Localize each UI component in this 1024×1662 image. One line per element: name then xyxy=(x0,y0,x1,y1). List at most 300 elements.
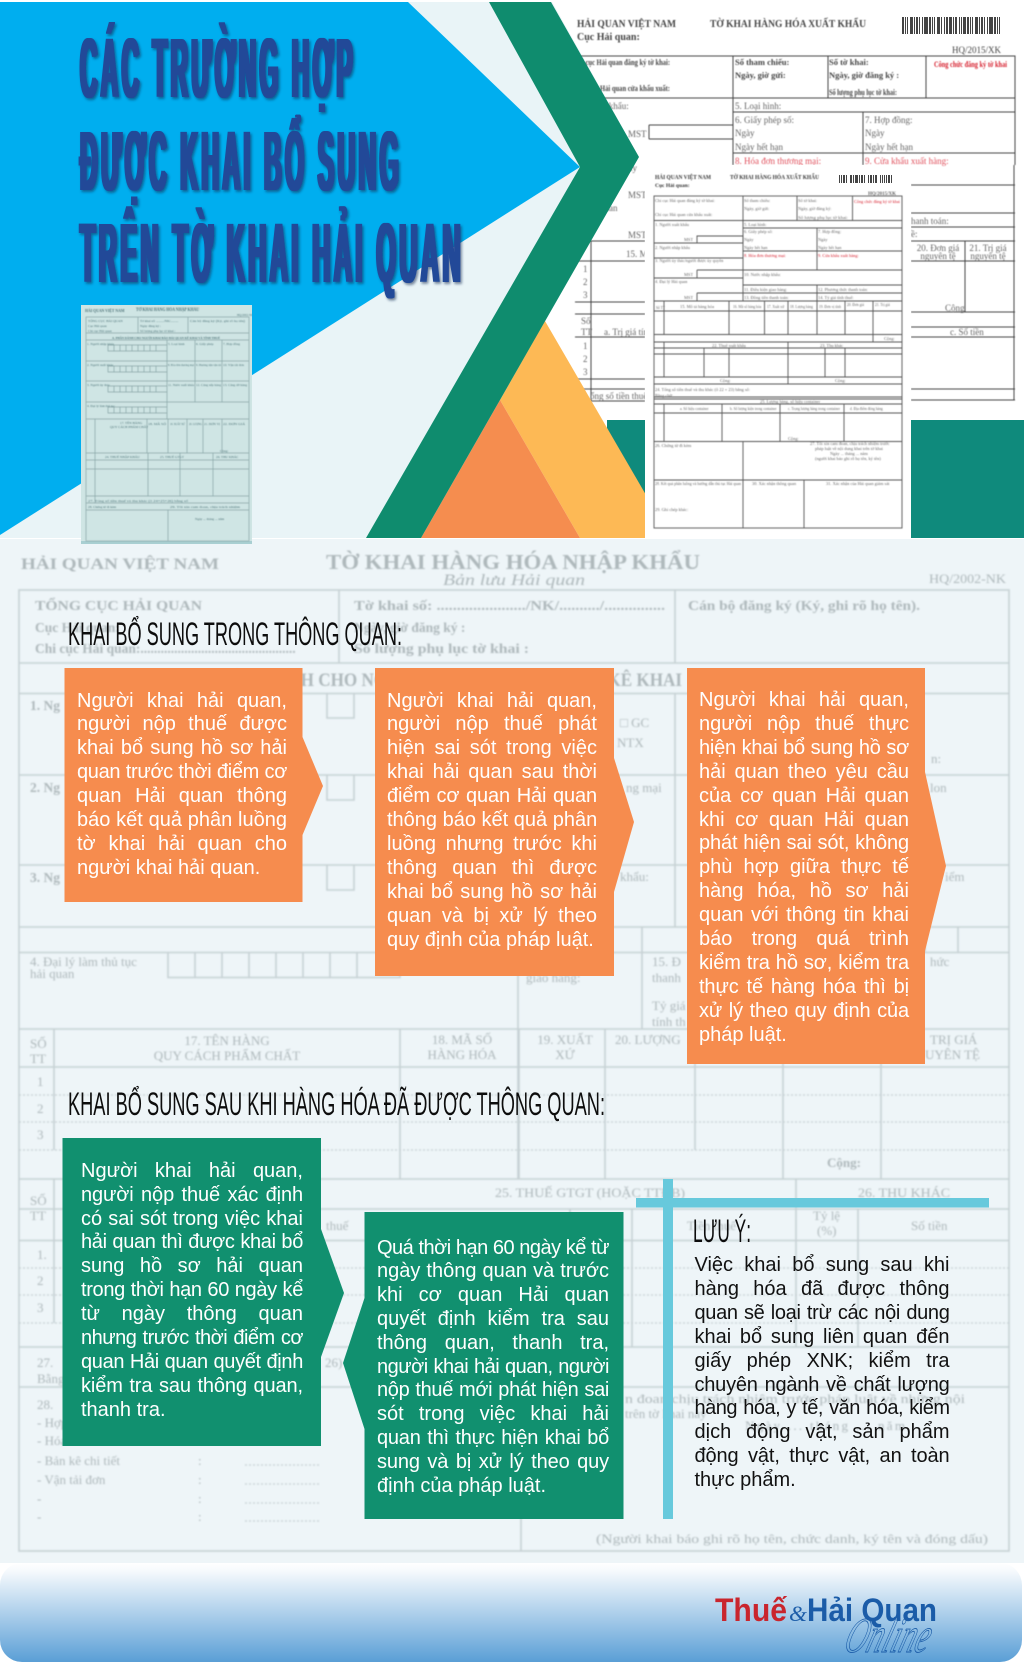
text block: lưu ý note: hàng hóa, y tế, văn hóa, kiểm xyxy=(694,1397,950,1419)
big export declaration form: 5. Loại hình: xyxy=(735,101,781,111)
background form: faded import declaration: ng mại xyxy=(626,780,662,795)
small export form: Ngày hết hạn xyxy=(744,245,768,250)
big export declaration form: nguyên tệ xyxy=(970,251,1006,261)
small export form: 22. Thuế xuất khẩu xyxy=(712,343,747,348)
big export declaration form: Ngày xyxy=(735,128,755,138)
small export form: 31. Xác nhận của Hải quan giám sát xyxy=(826,481,890,486)
panel: orange callout 2: quan và bị xử lý theo xyxy=(387,905,597,927)
teal blocks xyxy=(607,420,647,538)
panel: green callout 2: người khai hải quan, người xyxy=(377,1356,609,1378)
text block: lưu ý note: quan sẽ loại trừ các nội dung xyxy=(694,1302,950,1324)
big export declaration form: Ngày xyxy=(865,128,885,138)
panel: orange callout 2: quy định của pháp luật. xyxy=(387,929,594,951)
panel: green callout 2: quan thì thực hiện khai bổ xyxy=(377,1427,609,1449)
background form: faded import declaration: 3 xyxy=(37,1300,44,1315)
big export declaration form: hanh toán: xyxy=(911,216,949,226)
thumbnail import declaration form: 24. THUẾ NHẬP KHẨU xyxy=(105,454,140,459)
background form: faded import declaration: 19. XUẤT xyxy=(537,1032,593,1047)
orange triangle xyxy=(421,400,580,538)
thumbnail import declaration form: 9. Phương tiện vận tải xyxy=(196,363,221,367)
panel: orange callout 1: quan trước thời điểm cơ xyxy=(77,761,287,783)
small export form: 9. Cửa khẩu xuất hàng: xyxy=(818,253,859,258)
big export declaration form: c. Số tiền xyxy=(950,327,984,337)
background form: faded import declaration: 26) xyxy=(325,1355,342,1370)
small export form: Số TT xyxy=(656,306,666,310)
big export declaration form: Số lượng phụ lục tờ khai: xyxy=(829,87,897,97)
background form: faded import declaration: - xyxy=(37,1509,41,1524)
footer band xyxy=(0,1563,1022,1662)
thumbnail import declaration form: 13. Cảng dỡ hàng xyxy=(223,383,247,387)
panel: green callout 2: ngày thông quan và trước xyxy=(377,1260,609,1282)
background form: faded import declaration: 25. THUẾ GTGT (HOẶC TTĐB) xyxy=(495,1185,685,1200)
panel: green callout 2: sung và bị xử lý theo quy xyxy=(377,1451,609,1473)
small export form: 30. Xác nhận thông quan xyxy=(752,481,797,486)
small export form: Công chức đăng ký tờ khai xyxy=(854,199,901,204)
panel: green callout 1: nhưng trước thời điểm cơ xyxy=(81,1327,303,1349)
small export form: Chi cục Hải quan đăng ký tờ khai: xyxy=(655,198,715,203)
text block: lưu ý note: hàng hóa đã được thông xyxy=(694,1278,950,1300)
small export form: pháp luật về nội dung khai trên tờ khai xyxy=(815,446,884,451)
panel: orange callout 3: thực tế hàng hóa thì bị xyxy=(699,976,909,998)
thumbnail import declaration form: Số lượng phụ lục tờ khai : xyxy=(140,329,175,333)
panel: green callout 2: khi cơ quan Hải quan xyxy=(377,1284,609,1306)
big export declaration form: TỜ KHAI HÀNG HÓA XUẤT KHẨU xyxy=(710,17,866,30)
thumbnail import declaration form: 6. Giấy phép xyxy=(196,342,214,346)
background form: faded import declaration: 18. MÃ SỐ xyxy=(432,1032,492,1047)
thumbnail import declaration form: A. PHẦN DÀNH CHO NGƯỜI KHAI BÁO HẢI QUAN KÊ KHAI VÀ TÍNH THUẾ xyxy=(112,335,221,340)
background form: faded import declaration: - Hợp xyxy=(37,1415,67,1430)
big export declaration form: ổng số tiền thuế và xyxy=(590,391,658,401)
background form: faded import declaration: TỔNG CỤC HẢI QUAN xyxy=(35,598,202,613)
text block: lưu ý note: thực phẩm. xyxy=(694,1469,796,1491)
panel: green callout 1: thanh tra. xyxy=(81,1399,166,1421)
thumbnail import declaration form: 28. Chứng từ đi kèm xyxy=(88,505,116,509)
text block: lưu ý note: chuyên ngành về chất lượng xyxy=(694,1374,950,1396)
thumbnail import declaration form: 3. Người ủy thác xyxy=(87,383,110,387)
thumbnail import declaration form: 7. Hợp đồng xyxy=(223,342,240,346)
thumbnail import declaration form: QUY CÁCH PHẨM CHẤT xyxy=(110,424,149,429)
background form: faded import declaration: Ngày ... tháng ... năm xyxy=(745,1418,905,1433)
panel: orange callout 3: Người khai hải quan, xyxy=(699,689,909,711)
background form: faded import declaration: : xyxy=(198,1453,202,1468)
big export declaration form: 3 xyxy=(583,290,588,300)
background form: faded import declaration: giao hàng: xyxy=(526,970,581,985)
thumbnail import declaration form: 17. TÊN HÀNG xyxy=(120,420,143,425)
big export declaration form: i cục Hải quan đăng ký tờ khai: xyxy=(582,57,670,67)
small export form: TỜ KHAI HÀNG HÓA XUẤT KHẨU xyxy=(730,173,819,181)
background form: faded import declaration: 20. LƯỢNG xyxy=(615,1032,681,1047)
panel: green callout 2 xyxy=(343,1212,624,1519)
thumbnail import declaration form: Cán bộ đăng ký (Ký, ghi rõ họ tên) xyxy=(190,319,245,324)
big export declaration form: 9. Cửa khẩu xuất hàng: xyxy=(865,156,949,166)
big export declaration form: ủy xyxy=(628,163,638,173)
thumbnail import declaration form: 8. Hóa đơn thương mại xyxy=(168,363,194,367)
panel: orange callout 2: điểm cơ quan Hải quan xyxy=(387,785,597,807)
header background xyxy=(0,2,1024,538)
big export declaration form: Công chức đăng ký tờ khai xyxy=(934,60,1008,69)
big export declaration form: 3 xyxy=(583,367,588,377)
small export form: 7. Hợp đồng: xyxy=(818,229,841,234)
big export declaration form: Ngày hết hạn xyxy=(865,142,913,152)
big export declaration form: quan xyxy=(600,203,618,213)
panel: orange callout 3: người nộp thuế thực xyxy=(699,713,909,735)
panel: green callout 2: nộp thuế mới phát hiện sai xyxy=(377,1379,609,1401)
background form: faded import declaration: Cộng: xyxy=(827,1155,861,1170)
background form: faded import declaration: - Vận tải đơn xyxy=(37,1472,106,1487)
small export form: Ngày xyxy=(818,237,828,242)
thumbnail import declaration form: 26. THU KHÁC xyxy=(216,454,239,459)
big export declaration form: Hải quan cửa khẩu xuất: xyxy=(600,83,670,93)
background form: faded import declaration: Tỷ giá xyxy=(652,998,686,1013)
thumbnail import declaration form: 5. Loại hình xyxy=(168,342,185,346)
panel: orange callout 1: khai bổ sung hồ sơ hải xyxy=(77,737,287,759)
panel: orange callout 3: xử lý theo quy định của xyxy=(699,1000,909,1022)
panel: orange callout 2: khai hải quan sau thời xyxy=(387,761,597,783)
text block: lưu ý note xyxy=(694,1254,950,1491)
background form: faded import declaration: 3. Ng xyxy=(30,870,60,885)
small export form: Bằng chữ: xyxy=(655,393,673,398)
background form: faded import declaration: tính th xyxy=(652,1014,686,1029)
background form: faded import declaration: 4. Đại lý làm thủ tục xyxy=(30,954,137,969)
big export declaration form xyxy=(551,17,1015,401)
big export declaration form: Số xyxy=(581,316,591,326)
thumbnail import declaration form: Tờ khai số: ........./NK/......... xyxy=(140,319,178,323)
background form: faded import declaration: Bằng xyxy=(37,1371,65,1386)
small export form: Số tham chiếu: xyxy=(744,198,770,203)
panel: orange callout 1: báo kết quả phân luồng xyxy=(77,809,287,831)
small export form: 11. Điều kiện giao hàng: xyxy=(744,287,787,292)
small export form: 18. Lượng hàng xyxy=(790,305,813,309)
barcode small xyxy=(839,175,895,183)
background form: faded import declaration: n đoan chịu trách nhiệm trước pháp luật về những nội xyxy=(625,1391,965,1406)
small export form: 29. Ghi chép khác: xyxy=(655,507,688,512)
small export form: Ngày, giờ đăng ký: xyxy=(798,206,832,212)
panel: orange callout 3: hàng hóa, hồ sơ hải xyxy=(699,880,909,902)
background form: faded import declaration: A. PHẦN DÀNH CHO NGƯỜI KHAI BÁO HẢI QUAN KÊ KHAI xyxy=(190,669,682,691)
background form: faded import declaration: □ GC xyxy=(620,715,649,730)
big export declaration form: 6. Giấy phép số: xyxy=(735,115,794,125)
small export form: 28. Kết quả phân luồng và hướng dẫn thủ tục Hải quan xyxy=(655,481,742,486)
background form: faded import declaration: Bản lưu Hải quan xyxy=(443,572,585,589)
big export declaration form: 2 xyxy=(583,354,588,364)
big export declaration form: 20. Đơn giá xyxy=(917,243,959,253)
small export form: 14. Tỷ giá tính thuế: xyxy=(818,295,854,300)
small export form: HQ/2015/XK xyxy=(868,192,896,197)
thumbnail import declaration form: TỔNG CỤC HẢI QUAN xyxy=(88,318,123,323)
background form: faded import declaration: XỨ xyxy=(555,1047,576,1062)
small export form: 8. Hóa đơn thương mại: xyxy=(744,253,786,258)
big export declaration form: MST xyxy=(628,190,647,200)
small export form: 12. Phương thức thanh toán: xyxy=(818,287,868,292)
big export declaration form: 1 xyxy=(583,264,588,274)
text block: lưu ý note: động vật, thực vật, an toàn xyxy=(694,1445,950,1467)
text block: lưu ý note: dịch động vật, sản phẩm xyxy=(694,1421,950,1443)
panel: orange callout 3: phát hiện sai sót, không xyxy=(699,832,909,854)
panel: orange callout 2: Người khai hải quan, xyxy=(387,690,597,712)
thumbnail import declaration form: 27. Tổng số tiền thuế và thu khác (ô 24+25+26) bằng số xyxy=(88,498,188,503)
small export form: 23. Thu khác xyxy=(820,343,843,348)
small export form: MST xyxy=(684,272,693,277)
thumbnail import declaration form xyxy=(81,305,252,544)
panel: orange callout 3: phù hợp giữa thực tế xyxy=(699,856,909,878)
panel: orange callout 1: người khai hải quan. xyxy=(77,857,260,879)
small export form: Cộng: xyxy=(884,336,895,341)
panel: orange callout 2: luồng nhưng trước khi xyxy=(387,833,597,855)
background form: faded import declaration: 1. xyxy=(37,1247,47,1262)
icon: light blue cross divider xyxy=(636,1179,989,1519)
thumbnail import declaration form: 4. Đại lý làm thủ tục xyxy=(87,404,115,408)
background form: faded import declaration: NTX xyxy=(617,735,644,750)
small export form: 5. Loại hình: xyxy=(744,222,767,227)
panel: orange callout 2: khai bổ sung hồ sơ hải xyxy=(387,881,597,903)
small export form: c. Trọng lượng hàng trong container xyxy=(788,407,841,411)
logo: Thuế & Hải Quan Online xyxy=(715,1592,940,1662)
thumbnail import declaration form: 18. MÃ SỐ xyxy=(148,421,167,426)
thumbnail import declaration form: TỜ KHAI HÀNG HÓA NHẬP KHẨU xyxy=(136,307,199,313)
background form: faded import declaration: HQ/2002-NK xyxy=(929,572,1006,586)
big export declaration form: nguyên tệ xyxy=(920,251,956,261)
panel: orange callout 3: của cơ quan Hải quan xyxy=(699,785,909,807)
background form: faded import declaration: QUY CÁCH PHẨM CHẤT xyxy=(154,1048,300,1063)
background form: faded import declaration: iểm xyxy=(945,869,964,884)
small export form: MST xyxy=(684,237,693,242)
small export form: Ngày hết hạn xyxy=(818,245,842,250)
big export declaration form: HQ/2015/XK xyxy=(952,45,1001,55)
background form: faded import declaration: - Hóa xyxy=(37,1433,66,1448)
panel: orange callout 3: báo trong quá trình xyxy=(699,928,909,950)
panel: green callout 2: quyết định kiểm tra sau xyxy=(377,1308,609,1330)
big export declaration form: TT xyxy=(581,327,592,337)
small export form: 24. Tổng số tiền thuế và thu khác (ô 22 + 23) bằng số: xyxy=(655,387,750,392)
small export form: 10. Nước nhập khẩu: xyxy=(744,272,781,277)
background form: faded import declaration: trên tờ khai này xyxy=(625,1406,707,1421)
thumbnail import declaration form: 19. XUẤT XỨ xyxy=(170,421,185,426)
background form: faded import declaration: 1. Ng xyxy=(30,698,60,713)
background form: faded import declaration: Tiền thuế xyxy=(687,1218,737,1233)
thumbnail import declaration form: HẢI QUAN VIỆT NAM xyxy=(85,308,125,313)
small export form: a. Số hiệu container xyxy=(680,407,709,411)
panel: green callout 1: kiểm tra sau thông quan, xyxy=(81,1375,303,1397)
background form: faded import declaration: hức xyxy=(930,954,950,969)
panel: green callout 2: định của pháp luật. xyxy=(377,1475,546,1497)
small export form: 27. Tôi xin cam đoan, chịu trách nhiệm trước xyxy=(810,441,890,447)
background form: faded import declaration: Số lượng phụ lục tờ khai : xyxy=(354,641,529,656)
background form: faded import declaration: 26. THU KHÁC xyxy=(858,1185,950,1200)
big export declaration form: Ngày, giờ đăng ký : xyxy=(829,70,899,80)
small export form: 13. Đồng tiền thanh toán: xyxy=(744,295,789,300)
background form: faded import declaration xyxy=(0,539,1024,1563)
panel: orange callout 3 xyxy=(687,668,946,1064)
small export form: 20. Đơn giá xyxy=(847,303,864,307)
small export form: 17. Xuất xứ xyxy=(767,305,785,309)
background form: faded import declaration: : xyxy=(198,1472,202,1487)
background form: faded import declaration: lon xyxy=(930,780,947,795)
background form: faded import declaration: : xyxy=(198,1509,202,1524)
small export form: Số tờ khai: xyxy=(798,198,817,203)
background form: faded import declaration: Ngày, giờ đăng ký : xyxy=(354,620,465,635)
background form: faded import declaration: HẢI QUAN VIỆT NAM xyxy=(21,556,219,573)
background form: faded import declaration: HÀNG HÓA xyxy=(428,1047,497,1062)
big export declaration form: 8. Hóa đơn thương mại: xyxy=(735,156,821,166)
panel: orange callout 3: hải quan theo yêu cầu xyxy=(699,761,909,783)
panel: orange callout 2 xyxy=(375,668,634,976)
background form: faded import declaration: Số tiền xyxy=(911,1218,948,1233)
big export declaration form: MST xyxy=(628,129,647,139)
small export form: 4. Đại lý Hải quan xyxy=(655,279,688,284)
thumbnail import declaration form: 10. Vận tải đơn xyxy=(223,363,244,367)
panel: green callout 1: quan Hải quan quyết định xyxy=(81,1351,303,1373)
small export form: Ngày, giờ gửi: xyxy=(744,206,769,212)
small export form: Ngày ... tháng ... năm xyxy=(830,451,868,456)
background form: faded import declaration: Chi cục Hải quan:.............................................. xyxy=(35,641,296,656)
background form: faded import declaration: UYÊN TỆ xyxy=(925,1047,980,1062)
thumbnail import declaration form: 20. LƯỢNG xyxy=(189,422,202,426)
panel: green callout 2: thông quan, thanh tra, xyxy=(377,1332,609,1354)
background form: faded import declaration: 2 xyxy=(37,1101,44,1116)
small export form: 16. Mã số hàng hóa xyxy=(733,305,762,309)
small export form: d. Địa điểm đóng hàng xyxy=(850,406,883,411)
panel: orange callout 2: người nộp thuế phát xyxy=(387,713,597,735)
big export declaration form: ất khẩu: xyxy=(600,101,629,111)
big export declaration form: Số tham chiếu: xyxy=(735,57,789,67)
background form: faded import declaration: (%) xyxy=(817,1223,836,1238)
big export declaration form: a. Trị giá tính xyxy=(604,327,653,337)
big export declaration form: 21. Trị giá xyxy=(969,243,1007,253)
small export form: Ngày xyxy=(744,237,754,242)
small export form: b. Số lượng kiện trong container xyxy=(730,407,777,411)
panel: green callout 1: người nộp thuế xác định xyxy=(81,1184,303,1206)
small export form: Cộng: xyxy=(835,378,846,383)
panel: orange callout 3: khi cơ quan Hải quan xyxy=(699,809,909,831)
background form: faded import declaration: 27. xyxy=(37,1355,53,1370)
background form: faded import declaration: thanh xyxy=(652,970,681,985)
background form: faded import declaration: - xyxy=(37,1491,41,1506)
background form: faded import declaration: 1 xyxy=(37,1074,44,1089)
big export declaration form: 2 xyxy=(583,277,588,287)
yellow triangle xyxy=(500,321,646,538)
background form: faded import declaration: Tỷ lệ xyxy=(813,1208,840,1223)
text block: lưu ý note: khai bổ sung liên quan đến xyxy=(694,1326,950,1348)
small export form: 6. Giấy phép số: xyxy=(744,229,773,234)
small export form: 25. Lượng hàng, số hiệu container xyxy=(760,399,821,405)
small export form: 3. Người ủy thác/người được ủy quyền xyxy=(655,258,724,263)
big export declaration form: Ngày hết hạn xyxy=(735,142,783,152)
panel: orange callout 3: pháp luật. xyxy=(699,1024,787,1046)
panel: green callout 1: có sai sót trong việc khai xyxy=(81,1208,303,1230)
thumbnail import declaration form: Ngày ... tháng ... năm xyxy=(195,517,225,521)
background form: faded import declaration: - Bản kê chi tiết xyxy=(37,1453,120,1468)
small export form: (người khai báo ghi rõ họ tên, ký tên) xyxy=(815,456,881,462)
panel: orange callout 1: Người khai hải quan, xyxy=(77,690,287,712)
text block: lưu ý note: giấy phép XNK; kiểm tra xyxy=(694,1350,950,1372)
small export form: Số lượng phụ lục tờ khai: xyxy=(798,215,848,220)
big export declaration form: HẢI QUAN VIỆT NAM xyxy=(577,17,676,30)
thumbnail import declaration form: Chi cục Hải quan xyxy=(88,329,112,333)
background form: faded import declaration: TT xyxy=(30,1208,46,1223)
background form: faded import declaration: Tờ khai số: ....................../NK/........../............... xyxy=(354,598,665,613)
thumbnail import declaration form: Cục Hải quan xyxy=(88,324,107,328)
background form: faded import declaration: Cục Hải quan: xyxy=(35,620,120,635)
thumbnail import declaration form: 11. Nước xuất khẩu xyxy=(168,382,194,387)
background form: faded import declaration: Cán bộ đăng ký (Ký, ghi rõ họ tên). xyxy=(688,598,920,613)
background form: faded import declaration: thuế xyxy=(326,1218,350,1233)
small export form: 15. Mô tả hàng hóa xyxy=(680,304,714,309)
panel: green callout 2: sót trong việc khai hải xyxy=(377,1403,609,1425)
background form: faded import declaration: 3 xyxy=(37,1127,44,1142)
big export declaration form: Cộng xyxy=(945,303,965,313)
small export form xyxy=(645,165,911,538)
thumbnail import declaration form: 2. Người xuất khẩu xyxy=(87,362,114,367)
background form: faded import declaration: TRỊ GIÁ xyxy=(930,1032,978,1047)
logo: Thuế & Hải Quan Online: & xyxy=(789,1601,808,1626)
background form: faded import declaration: SỐ xyxy=(30,1036,47,1051)
panel: green callout 1: sung hồ sơ hải quan xyxy=(81,1255,303,1277)
panel: orange callout 1: quan Hải quan thông xyxy=(77,785,287,807)
small export form: Chi cục Hải quan cửa khẩu xuất: xyxy=(655,212,712,217)
small export form: 21. Trị giá xyxy=(875,303,890,307)
small export form: 19. Đơn vị tính xyxy=(819,305,841,309)
panel: green callout 1: trong thời hạn 60 ngày kể xyxy=(81,1279,303,1301)
text block: lưu ý note: Việc khai bổ sung sau khi xyxy=(694,1254,950,1276)
small export form: 2. Người nhập khẩu xyxy=(655,245,691,250)
background form: faded import declaration: (Người khai báo ghi rõ họ tên, chức danh, ký tên và đóng dấu) xyxy=(596,1531,988,1546)
small export form: MST xyxy=(684,295,693,300)
thumbnail import declaration form: 25. THUẾ GTGT xyxy=(160,454,185,459)
big export declaration form: Số tờ khai: xyxy=(829,57,869,67)
panel: green callout 2: Quá thời hạn 60 ngày kể từ xyxy=(377,1237,609,1259)
panel: orange callout 2: thông quan thì được xyxy=(387,857,597,879)
panel: green callout 1: hải quan thì được khai bổ xyxy=(81,1231,303,1253)
panel: orange callout 3: quan với thông tin khai xyxy=(699,904,909,926)
background form: faded import declaration: n: xyxy=(931,751,941,766)
background form: faded import declaration: TỜ KHAI HÀNG HÓA NHẬP KHẨU xyxy=(326,550,700,574)
background form: faded import declaration: 28. xyxy=(37,1397,53,1412)
big export declaration form: 15. Mô xyxy=(626,249,653,259)
big export declaration form: MST xyxy=(628,230,647,240)
thumbnail import declaration form: Ngày đăng ký : xyxy=(140,324,161,328)
background form: faded import declaration: 2 xyxy=(37,1273,44,1288)
big export declaration form: Cục Hải quan: xyxy=(577,32,640,43)
small export form: 1. Người xuất khẩu xyxy=(655,222,690,227)
green chevron xyxy=(366,2,639,538)
panel: green callout 1: Người khai hải quan, xyxy=(81,1160,303,1182)
background form: faded import declaration: khẩu: xyxy=(620,869,649,884)
panel: green callout 1: từ ngày thông quan xyxy=(81,1303,303,1325)
big export declaration form: 7. Hợp đồng: xyxy=(865,115,913,125)
thumbnail import declaration form: Cộng: xyxy=(220,449,228,453)
blue arrow shape xyxy=(0,2,580,535)
small export form: Cục Hải quan: xyxy=(655,183,690,189)
panel: orange callout 3: hiện khai bổ sung hồ sơ xyxy=(699,737,909,759)
thumbnail import declaration form: 21. ĐƠN VỊ xyxy=(204,422,221,426)
thumbnail import declaration form: 29. Tôi xin cam đoan, chịu trách nhiệm xyxy=(170,505,240,510)
small export form: Cộng: xyxy=(788,436,799,441)
background form: faded import declaration: : xyxy=(198,1491,202,1506)
big export declaration form: 1 xyxy=(583,341,588,351)
background form: faded import declaration: 17. TÊN HÀNG xyxy=(184,1033,270,1048)
logo: Thuế & Hải Quan Online: Thuế xyxy=(715,1592,787,1628)
thumbnail import declaration form: 12. Cảng xếp hàng xyxy=(196,383,221,387)
small export form: 26. Chứng từ đi kèm xyxy=(655,443,692,448)
barcode big xyxy=(902,17,1002,34)
panel: orange callout 2: thông báo kết quả phân xyxy=(387,809,597,831)
background form: faded import declaration: hải quan xyxy=(30,966,75,981)
panel: orange callout 2: hiện sai sót trong việc xyxy=(387,737,597,759)
panel: orange callout 1: người nộp thuế được xyxy=(77,713,287,735)
background form: faded import declaration: SỐ xyxy=(30,1193,47,1208)
small export form: Cộng: xyxy=(720,378,731,383)
panel: orange callout 1 xyxy=(64,668,323,902)
